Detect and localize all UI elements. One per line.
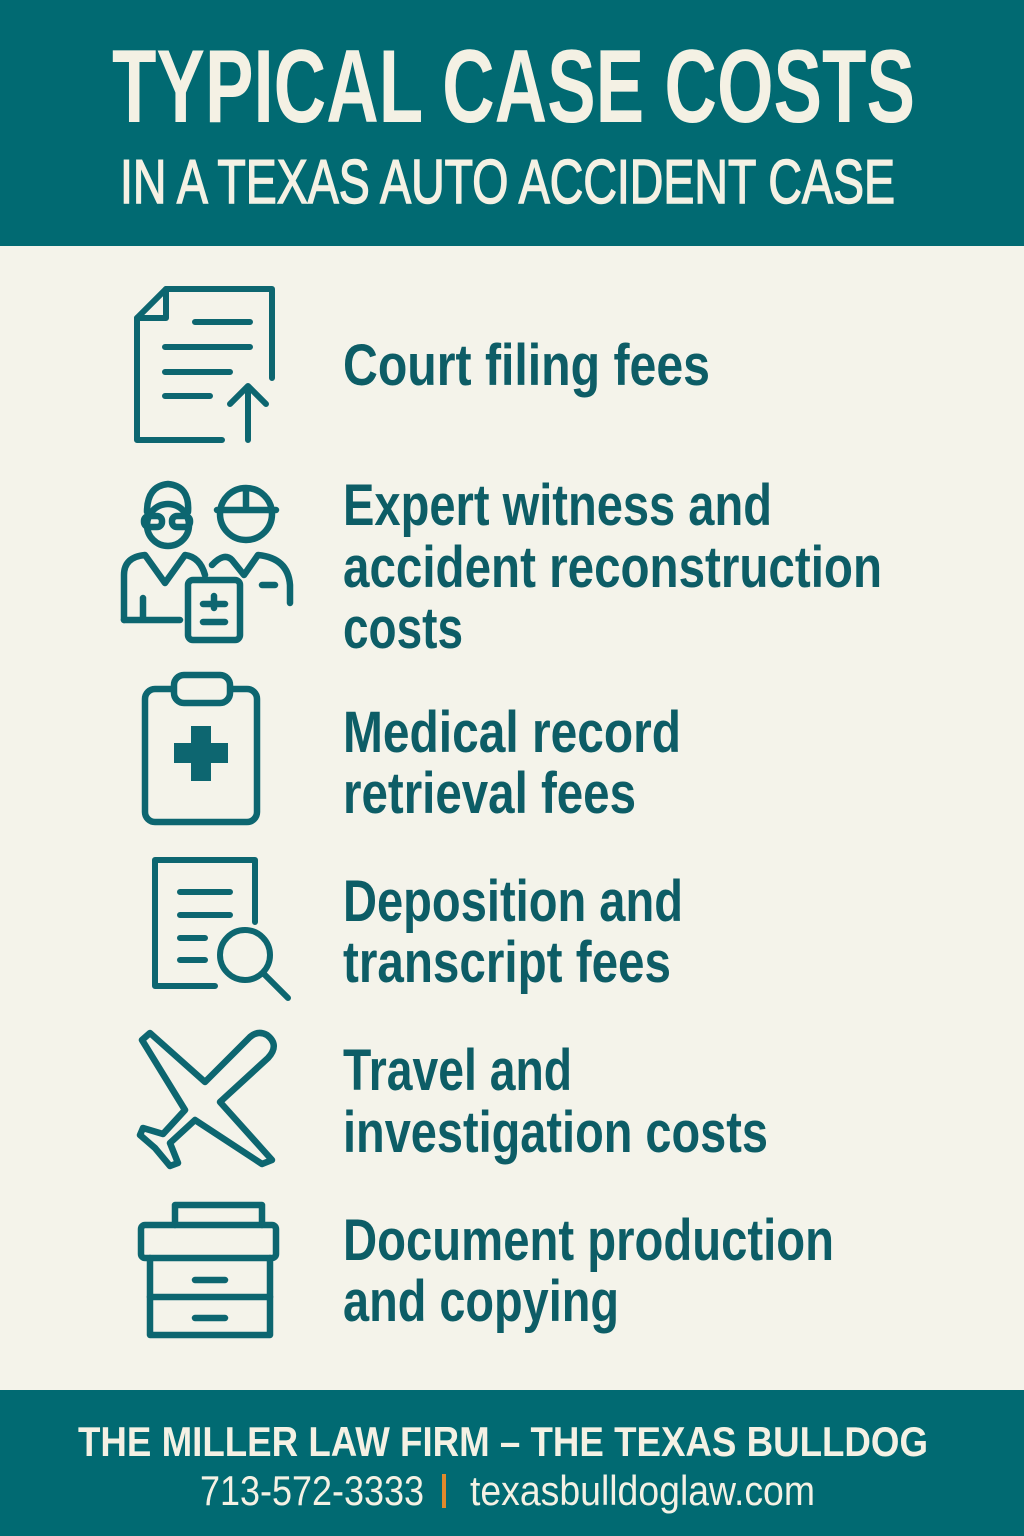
icon: document search — [155, 860, 288, 998]
item: expert witness: Expert witness and — [343, 473, 772, 538]
item: document production — [343, 1208, 834, 1334]
item: expert witness: costs — [343, 596, 463, 661]
icon: document upload — [137, 289, 272, 440]
item: travel: investigation costs — [343, 1100, 768, 1165]
item: travel: Travel and — [343, 1038, 572, 1103]
item: expert witness — [343, 473, 882, 661]
footer contact — [200, 1467, 815, 1514]
header banner — [0, 0, 1024, 246]
item: deposition: transcript fees — [343, 930, 671, 995]
item: expert witness: accident reconstruction — [343, 535, 882, 600]
footer contact: 713-572-3333 — [200, 1467, 424, 1514]
icon: airplane — [140, 1033, 274, 1166]
item: document production: Document production — [343, 1208, 834, 1273]
item: deposition: Deposition and — [343, 869, 683, 934]
item: deposition — [343, 869, 683, 995]
item: medical record: Medical record — [343, 700, 681, 765]
footer firm name: THE MILLER LAW FIRM – THE TEXAS BULLDOG — [78, 1418, 928, 1465]
icon: medical clipboard — [145, 675, 257, 822]
footer — [0, 1390, 1024, 1536]
item: medical record — [343, 700, 681, 826]
item: medical record: retrieval fees — [343, 761, 636, 826]
item: court filing fees: Court filing fees — [343, 333, 710, 398]
icon: experts — [124, 484, 290, 640]
icon: copier — [141, 1205, 276, 1335]
item: travel — [343, 1038, 768, 1165]
footer contact: texasbulldoglaw.com — [470, 1467, 815, 1514]
item: document production: and copying — [343, 1269, 619, 1334]
